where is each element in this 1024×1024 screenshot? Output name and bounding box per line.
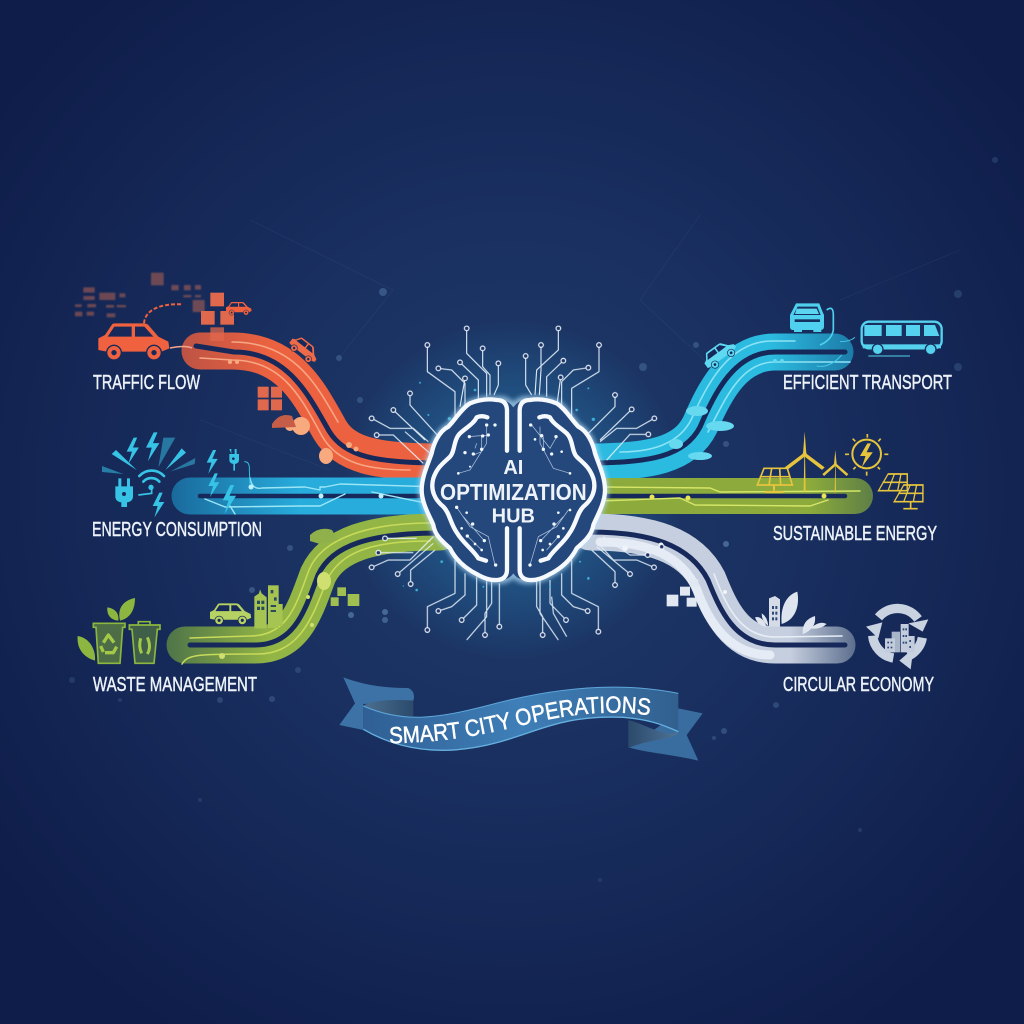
background network of faint nodes [69, 157, 998, 882]
label: efficient transport: EFFICIENT TRANSPORT [783, 372, 952, 394]
wind turbines [785, 451, 825, 491]
large car [98, 323, 169, 360]
orange squares [201, 293, 282, 410]
AI optimization hub brain [422, 399, 605, 580]
road: efficient transport (blue) [590, 341, 850, 463]
icons: efficient transport [700, 303, 942, 372]
car on road [287, 333, 322, 366]
bus [862, 322, 942, 348]
label: energy consumption: ENERGY CONSUMPTION [92, 519, 262, 541]
city buildings [254, 585, 283, 628]
brain outer glow [422, 399, 605, 580]
icons: energy consumption [102, 432, 250, 518]
wifi arcs [139, 471, 164, 482]
ribbon left tail [339, 677, 414, 730]
road: traffic flow (orange) [196, 342, 440, 470]
ribbon left fold [363, 700, 413, 716]
label: waste management: WASTE MANAGEMENT [93, 674, 257, 696]
icons: circular economy [667, 579, 928, 669]
dashed arc and connector [144, 304, 182, 323]
ribbon highlights [363, 687, 678, 717]
road: waste management (green) [182, 523, 440, 664]
car on road [210, 603, 251, 625]
solar panel on road [757, 468, 792, 485]
plug upper [229, 449, 239, 471]
plug left [115, 478, 133, 507]
building and leaves [769, 596, 780, 627]
white squares [667, 579, 698, 607]
connector from car to road [170, 346, 192, 348]
ribbon band [363, 687, 678, 750]
city in recycle [885, 624, 915, 652]
hub glow [343, 320, 683, 660]
road: sustainable energy (green) [590, 487, 860, 506]
recycle arrows [866, 608, 928, 669]
hub text: AI: AI [503, 456, 523, 479]
recycle bin [93, 623, 125, 663]
small car [226, 302, 252, 315]
front-facing car [790, 303, 824, 330]
title ribbon [340, 678, 702, 760]
hub text: OPTIMIZATION: OPTIMIZATION [440, 479, 587, 505]
radiating rays [102, 438, 195, 474]
sun with bolt [852, 440, 881, 468]
brain inner circuits [457, 425, 570, 565]
car on road [700, 336, 739, 372]
icons: traffic flow [75, 273, 322, 410]
ribbon right tail [628, 708, 703, 761]
label: traffic flow: TRAFFIC FLOW [93, 372, 200, 394]
road: energy consumption (cyan) [190, 478, 440, 514]
icons: waste management [78, 585, 359, 663]
hub text: HUB: HUB [492, 505, 535, 528]
circuit traces radiating from hub [369, 326, 664, 640]
ribbon right fold [628, 720, 679, 748]
road: circular economy (white) [590, 532, 845, 655]
label: circular economy: CIRCULAR ECONOMY [783, 674, 934, 696]
pair of solar panels [879, 474, 911, 491]
leaves [78, 598, 135, 661]
green squares [331, 587, 359, 606]
label: sustainable energy: SUSTAINABLE ENERGY [773, 523, 937, 545]
brain outlines [422, 399, 605, 580]
data fragments [75, 273, 205, 317]
ribbon title: SMART CITY OPERATIONS [390, 696, 650, 744]
second bin [129, 625, 160, 663]
icons: sustainable energy [757, 432, 927, 509]
brain fill [422, 399, 605, 580]
